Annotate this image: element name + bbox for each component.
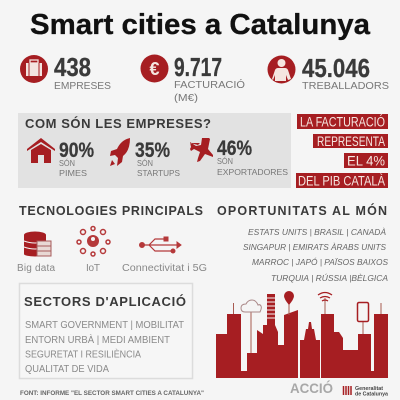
callout: facturacio PIB: EL 4% [347,154,385,168]
stat: facturacio: (M€) [174,92,198,104]
icon: database [24,232,51,256]
sector list [25,319,185,375]
stat: facturacio: FACTURACIÓ [174,78,245,91]
logo: accio: ACCIÓ [290,379,333,396]
sector list: SEGURETAT I RESILIÈNCIA [25,348,141,360]
icon: person [268,56,296,84]
stat: empreses: EMPRESES [54,80,111,92]
tech: connectivitat [122,237,207,274]
title: Smart cities a Catalunya [30,9,371,41]
panel: com son les empreses [18,113,291,188]
heading: tecnologies principals: TECNOLOGIES PRINCIPALS [19,204,203,218]
stat: pimes [59,139,94,178]
heading: COM SÓN LES EMPRESES? [25,116,211,131]
list: countries: ESTATS UNITS | BRASIL | CANADÀ [248,227,386,237]
stat: treballadors: 45.046 [302,53,370,83]
tech: connectivitat: Connectivitat i 5G [122,263,207,274]
panel: sectors d'aplicacio [20,284,192,378]
list: countries: SINGAPUR | EMIRATS ÀRABS UNITS [243,242,386,252]
icon: euro: € [149,59,160,79]
stat: treballadors: TREBALLADORS [302,80,389,92]
stat: facturacio [140,52,245,104]
stat: startups: STARTUPS [137,168,180,178]
stat: startups [135,139,180,178]
icon: network [77,226,110,256]
tech: iot [77,226,110,274]
tower stripes [267,298,275,318]
callout: facturacio PIB [296,114,388,188]
tech: iot: IoT [86,263,100,274]
icon: phone [358,302,368,322]
stat: facturacio: 9.717 [174,52,222,82]
list: countries: MARROC | JAPÓ | PAÏSOS BAIXOS [252,257,388,267]
stat: startups: SÓN [137,158,153,168]
stat: startups: 35% [135,139,170,162]
icon: usb [140,237,181,253]
icon: wifi [318,292,332,301]
stat: exportadores [217,137,288,177]
heading: oportunitats al mon: OPORTUNITATS AL MÓN [217,203,387,218]
stat: empreses [20,52,111,92]
list: countries: TURQUIA | RÚSSIA |BÈLGICA [271,273,388,283]
stat: treballadors [268,53,389,92]
sector list: ENTORN URBÀ | MEDI AMBIENT [25,333,171,346]
illustration: skyline [216,291,388,378]
buildings [216,294,388,378]
list: countries [243,227,388,283]
source note: FONT: INFORME "EL SECTOR SMART CITIES A CATALUNYA" [20,390,204,397]
stat: exportadores: SÓN [217,156,233,166]
icon: cloud [241,300,261,312]
sector list: QUALITAT DE VIDA [25,363,109,375]
tech: big data [17,232,55,274]
stat: pimes: PIMES [59,168,87,178]
icon: plane [190,138,213,162]
antennas [234,298,381,353]
stat: exportadores: 46% [217,137,252,160]
stat: pimes: SÓN [59,158,75,168]
sector list: SMART GOVERNMENT | MOBILITAT [25,319,185,331]
icon: house [27,138,55,163]
logo: generalitat: de Catalunya [355,392,388,398]
tech: big data: Big data [17,263,55,274]
logo: generalitat: Generalitat [355,386,383,392]
icon: briefcase [20,55,48,83]
heading: SECTORS D'APLICACIÓ [24,294,186,309]
stat: exportadores: EXPORTADORES [217,167,288,177]
logo: generalitat [344,386,388,398]
stat: pimes: 90% [59,139,94,162]
icon: pin [284,291,294,305]
icon: rocket [110,138,130,166]
stat: empreses: 438 [54,52,91,82]
